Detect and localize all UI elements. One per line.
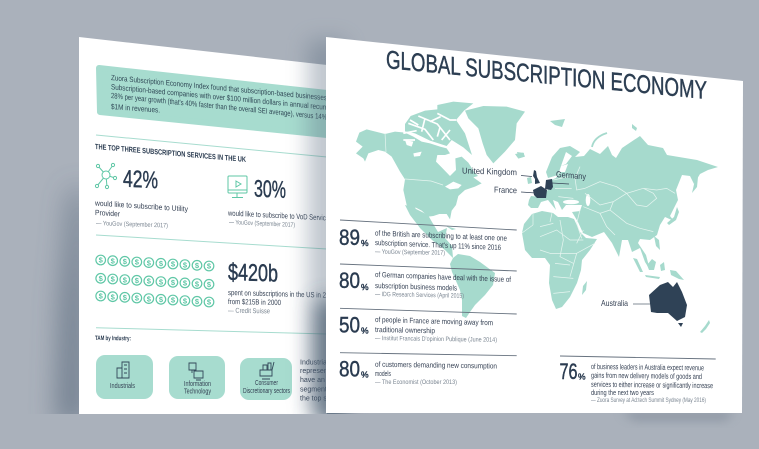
callout: teal summary box	[99, 68, 327, 135]
stat row: 50 percent: 50	[339, 312, 360, 338]
stat row: 89 percent: subscription service. That's up 11% since 2016	[375, 238, 501, 252]
stat row: 80 percent German companies: subscription business models	[375, 281, 457, 292]
stat row: 80 percent German companies: of German companies have deal with the issue of	[375, 270, 512, 284]
map: Eurasia	[517, 119, 718, 270]
label: France	[494, 185, 536, 195]
card: information technology	[169, 356, 225, 399]
icon: dollar coin grid	[96, 255, 214, 307]
shadow cast by right page	[308, 40, 345, 425]
icon: dollar coin grid: $	[207, 280, 212, 289]
text: US spending: spent on subscriptions in the US in 2016	[228, 288, 336, 300]
stat row: 76 percent Australia: — Zuora Survey at Ad:tech Summit Sydney (May 2016)	[591, 397, 706, 404]
stat row: 76 percent Australia	[560, 356, 716, 404]
card: information technology: Technology	[184, 389, 211, 396]
icon: dollar coin grid: $	[147, 258, 152, 267]
text: industrials side note: segments	[300, 386, 331, 394]
label: France: France	[494, 185, 517, 195]
text: VoD services	[227, 208, 332, 229]
icon: dollar coin grid: $	[135, 276, 140, 285]
map: highlighted France	[533, 186, 547, 198]
callout: teal summary box: 28% per year growth (that's 40% faster than the overall SEI average), versus 14%	[111, 91, 327, 122]
stat row: 76 percent Australia: services to either increase or significantly increase	[591, 380, 713, 390]
arrow: Australia	[633, 303, 650, 305]
icon: dollar coin grid: $	[207, 262, 212, 271]
stat row: 80 percent customers: %	[361, 370, 369, 380]
map: highlighted Germany	[545, 179, 553, 190]
icon: network	[95, 163, 117, 189]
icon: dollar coin grid: $	[111, 292, 116, 301]
text: VoD services: would like to subscribe to VoD Services	[227, 208, 332, 223]
label: Australia	[601, 298, 650, 308]
icon: dollar coin grid: $	[183, 296, 188, 305]
world map	[356, 102, 718, 333]
icon: dollar coin grid: $	[171, 260, 176, 269]
stat row: 80 percent German companies	[339, 264, 517, 300]
icon: dollar coin grid: $	[171, 296, 176, 305]
icon: dollar coin grid: $	[183, 260, 188, 269]
stat row: 80 percent German companies: 80	[339, 268, 360, 293]
icon: dollar coin grid: $	[99, 256, 104, 265]
heading: top three services: THE TOP THREE SUBSCRIPTION SERVICES IN THE UK	[95, 142, 246, 164]
icon: dollar coin grid: $	[147, 294, 152, 303]
stat row: 50 percent: — Institut Francais D'opinion Publique (June 2014)	[375, 335, 497, 344]
stat row: 89 percent: — YouGov (September 2017)	[375, 249, 445, 257]
map: North America and Greenland	[356, 102, 525, 219]
stat: 42 percent: 42%	[123, 166, 158, 194]
text: utility provider: would like to subscribe to Utility	[94, 198, 188, 214]
card: industrials: Industrials	[110, 383, 135, 390]
callout: teal summary box: $1M in revenues.	[111, 102, 160, 115]
icon: dollar coin grid: $	[195, 279, 200, 288]
arrow: France	[521, 192, 536, 193]
stat row: 89 percent	[339, 220, 517, 257]
text: industrials side note	[300, 360, 339, 402]
text: industrials side note: Industrials	[300, 360, 332, 366]
callout: teal summary box: Subscription-based companies with over $100 million dollars in annual recurr	[111, 82, 327, 112]
stat row: 80 percent customers	[339, 353, 517, 386]
text: VoD services: — YouGov (September 2017)	[229, 219, 295, 229]
card: information technology: Information	[184, 381, 211, 388]
text: utility provider: Provider	[95, 208, 120, 219]
icon: dollar coin grid: $	[207, 298, 212, 307]
icon: dollar coin grid: $	[159, 259, 164, 268]
map: highlighted Australia	[649, 282, 687, 327]
stat row: 76 percent Australia: of business leaders in Australia expect revenue	[591, 362, 704, 372]
heading: TAM by industry: TAM by Industry:	[95, 335, 131, 342]
stat row: 50 percent	[339, 308, 517, 344]
arrow: Germany	[552, 183, 569, 184]
stat row: 80 percent customers: 80	[339, 357, 360, 382]
arrow: United Kingdom	[521, 176, 532, 177]
icon: computers	[189, 363, 203, 380]
stat: 30 percent: 30%	[254, 176, 286, 204]
stat row: 89 percent: of the British are subscribing to at least one one	[375, 229, 507, 243]
stat row: 89 percent: %	[361, 238, 369, 248]
icon: video monitor	[228, 176, 247, 198]
icon: dollar coin grid: $	[111, 275, 116, 284]
label: Germany	[552, 169, 587, 184]
callout: teal summary box: Zuora Subscription Economy Index found that subscription-based businesses	[111, 73, 327, 102]
label: United Kingdom: United Kingdom	[462, 166, 517, 177]
icon: dollar coin grid: $	[159, 277, 164, 286]
card: consumer discretionary: Consumer	[255, 380, 278, 387]
text: industrials side note: represent	[300, 368, 330, 375]
stat row: 80 percent customers: models	[375, 369, 391, 378]
icon: dollar coin grid: $	[159, 295, 164, 304]
icon: dollar coin grid: $	[183, 279, 188, 288]
icon: dollar coin grid: $	[99, 292, 104, 301]
right page lower shadow	[620, 412, 735, 420]
icon: dollar coin grid: $	[123, 257, 128, 266]
map: Africa	[522, 211, 597, 309]
text: US spending	[228, 288, 336, 315]
text: utility provider	[94, 198, 188, 230]
stat row: 50 percent: of people in France are moving away from	[375, 315, 493, 327]
icon: dollar coin grid: $	[135, 258, 140, 267]
stat row: 80 percent German companies: — IDG Research Services (April 2015)	[375, 291, 464, 300]
stat row: 76 percent Australia: gains from new delivery models of goods and	[591, 371, 702, 381]
icon: dollar coin grid: $	[123, 275, 128, 284]
stat row: 50 percent: traditional ownership	[375, 325, 435, 335]
icon: dollar coin grid: $	[123, 293, 128, 302]
stat row: 80 percent German companies: %	[361, 282, 369, 292]
icon: dollar coin grid: $	[147, 277, 152, 286]
stat row: 80 percent customers: of customers demanding new consumption	[375, 360, 497, 371]
stat: 420 billion: $420b	[228, 259, 278, 287]
panel: left page	[79, 37, 339, 414]
map: highlighted UK	[533, 170, 540, 184]
text: US spending: — Credit Suisse	[228, 308, 270, 315]
text: industrials side note: have an ATA	[300, 377, 339, 384]
text: US spending: from $215B in 2000	[228, 297, 281, 307]
map: Central and South America	[405, 205, 495, 318]
icon: dollar coin grid: $	[99, 274, 104, 283]
text: utility provider: — YouGov (September 2017)	[96, 220, 168, 230]
icon: dollar coin grid: $	[195, 261, 200, 270]
stat row: 76 percent Australia: during the next two years	[591, 388, 654, 397]
text: industrials side note: the top six	[300, 396, 332, 402]
card: industrials	[96, 355, 153, 399]
label: Germany: Germany	[556, 169, 587, 181]
stat row: 80 percent customers: — The Economist (October 2013)	[375, 379, 457, 386]
map: country borders	[385, 133, 675, 293]
label: Australia: Australia	[601, 298, 628, 308]
card: consumer discretionary: Discretionary sectors	[243, 388, 290, 395]
icon: shopping trolley	[260, 362, 274, 379]
icon: dollar coin grid: $	[171, 278, 176, 287]
left page shadow	[58, 190, 85, 425]
icon: dollar coin grid: $	[195, 297, 200, 306]
icon: dollar coin grid: $	[111, 256, 116, 265]
map: South-East Asia and Oceania	[633, 258, 710, 333]
stat row: 50 percent: %	[361, 326, 369, 336]
stat row: 89 percent: 89	[339, 225, 360, 250]
stat row: 76 percent Australia: 76	[560, 359, 578, 384]
icon: buildings	[117, 362, 129, 378]
icon: dollar coin grid: $	[135, 294, 140, 303]
stat row: 76 percent Australia: %	[578, 372, 586, 382]
card: consumer discretionary	[240, 358, 292, 400]
panel: right page	[326, 37, 743, 413]
